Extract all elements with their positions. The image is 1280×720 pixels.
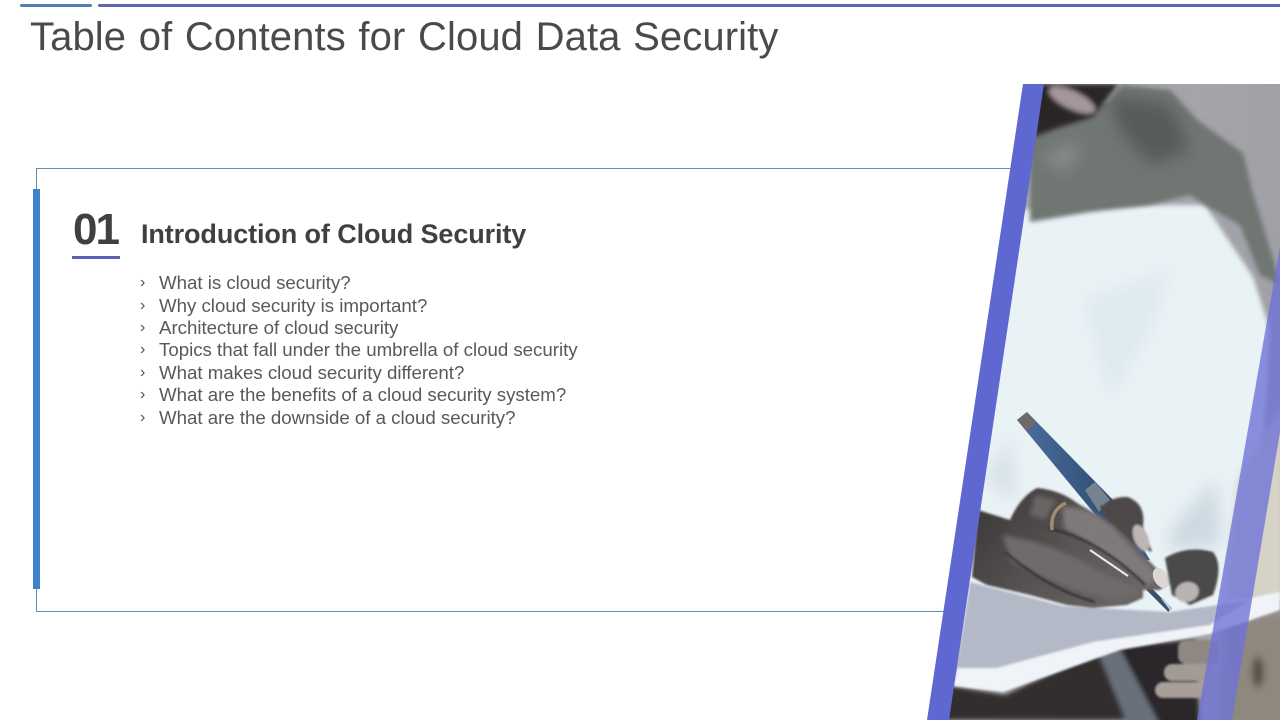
- right thumb: [1165, 550, 1218, 605]
- pen clip gap: [1090, 550, 1128, 576]
- bullet list: ›: [140, 341, 145, 358]
- top accent bar: long indigo: [98, 4, 1280, 7]
- ring: [1052, 503, 1066, 530]
- bullet list: What makes cloud security different?: [159, 362, 464, 383]
- bullet list: ›: [140, 386, 145, 403]
- top accent bar: short blue: [20, 4, 92, 7]
- lower fingers: [1155, 640, 1218, 698]
- bullet list: What is cloud security?: [159, 272, 351, 293]
- lower right background: [1225, 415, 1280, 720]
- scarf folds: [1040, 95, 1190, 170]
- photo background: [940, 84, 1280, 720]
- bullet list: What are the downside of a cloud security?: [159, 407, 516, 428]
- finger highlights: [1003, 495, 1160, 600]
- index fingernail: [1152, 568, 1169, 588]
- dark jeans: [945, 640, 1200, 720]
- bullet list: What are the benefits of a cloud security system?: [159, 384, 566, 405]
- slanted strip: translucent indigo: [1197, 247, 1280, 720]
- panel accent bar: [33, 189, 40, 589]
- bullet list: ›: [140, 297, 145, 314]
- bullet list: ›: [140, 409, 145, 426]
- section number: 01: [73, 205, 118, 254]
- shirt shadows: [985, 270, 1222, 550]
- bullet list: ›: [140, 319, 145, 336]
- shirt: [960, 205, 1270, 620]
- scarf: [1030, 85, 1280, 285]
- bullet list: [140, 272, 578, 428]
- finger creases: [1005, 528, 1145, 602]
- photo: hand writing with pen, with slanted indigo strips: [927, 84, 1280, 720]
- title: Table of Contents for Cloud Data Security: [30, 15, 778, 59]
- bullet list: Topics that fall under the umbrella of cloud security: [159, 339, 578, 360]
- bullet list: Why cloud security is important?: [159, 295, 427, 316]
- pen: [1017, 412, 1171, 610]
- slanted strip: solid indigo: [927, 84, 1044, 720]
- paper: [953, 580, 1280, 692]
- bullet list: ›: [140, 364, 145, 381]
- back finger: [1100, 497, 1153, 554]
- face and lips: [1034, 81, 1118, 137]
- writing hand: [972, 488, 1170, 608]
- bullet list: Architecture of cloud security: [159, 317, 398, 338]
- number underline: [72, 256, 120, 259]
- bullet list: ›: [140, 274, 145, 291]
- section heading: Introduction of Cloud Security: [141, 219, 526, 249]
